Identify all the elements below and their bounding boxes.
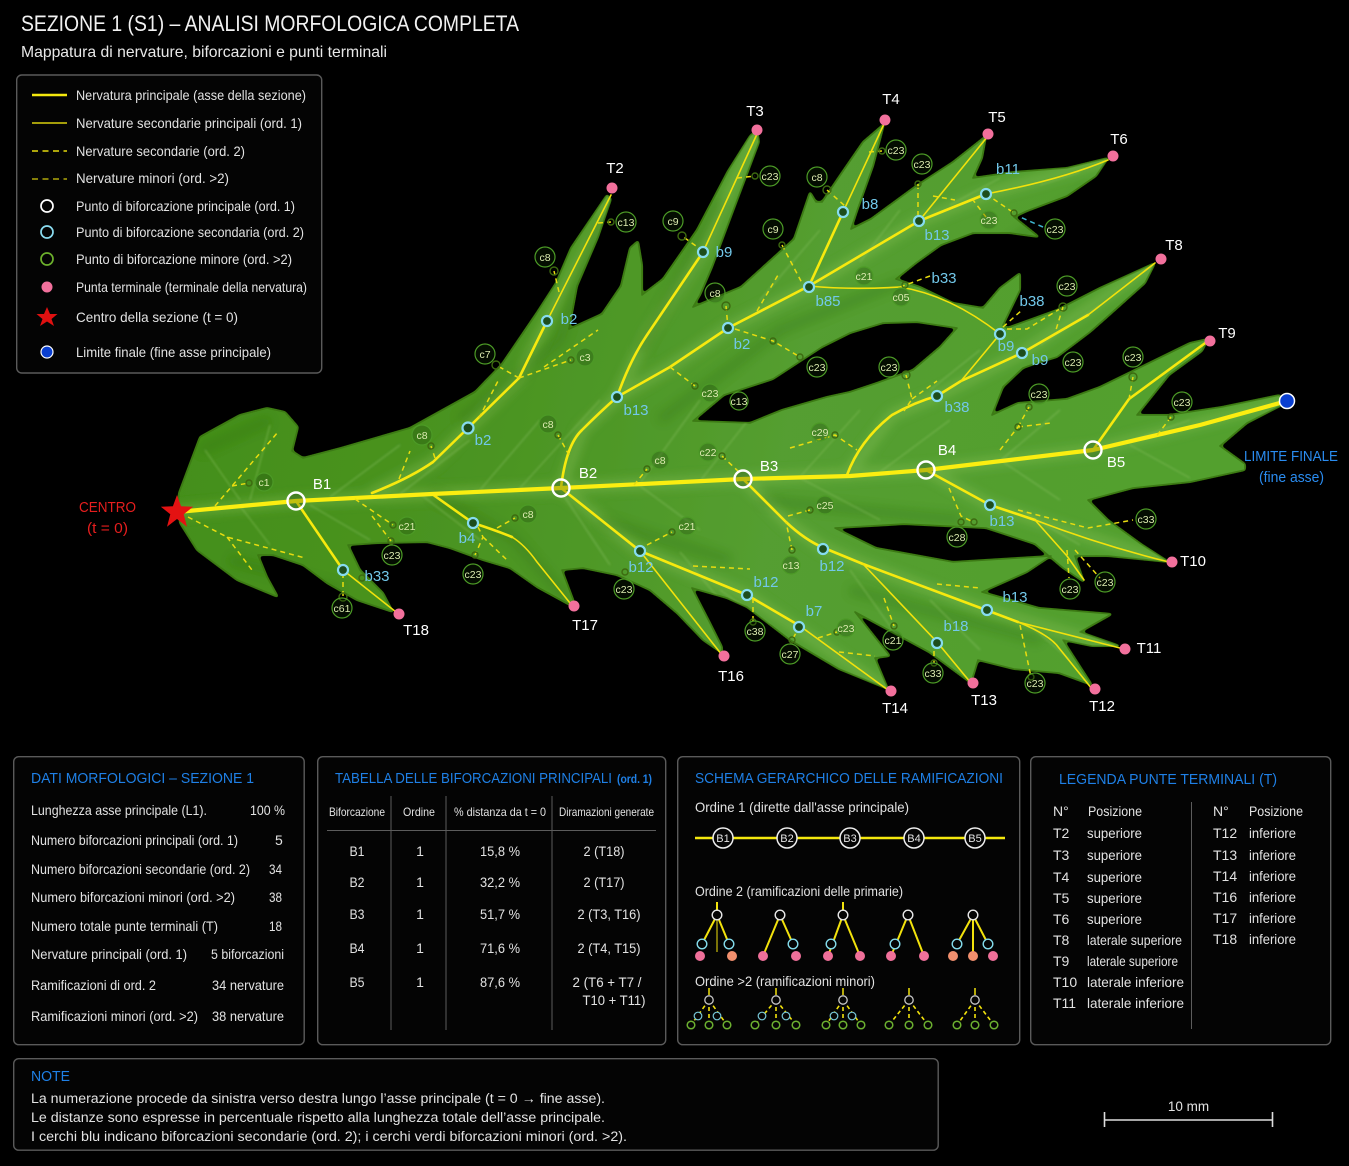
scale bar [1104, 1099, 1273, 1127]
data rows: Numero biforcazioni secondarie (ord. 2) [31, 861, 250, 877]
panel: map legend [17, 75, 322, 373]
panel: notes [14, 1059, 938, 1150]
centre label [79, 500, 136, 537]
legend swatch: terminal tip [42, 282, 52, 292]
minor bifurcation labels: c23 [1047, 224, 1064, 236]
table rows: B3 [350, 906, 365, 922]
right column: T18 [1213, 931, 1237, 947]
right column: T16 [1213, 889, 1237, 905]
centre label: (t = 0) [87, 521, 128, 537]
secondary bifurcation labels: b9 [716, 244, 732, 261]
table rows: 15,8 % [480, 843, 520, 859]
right column [1213, 803, 1303, 947]
minor bifurcation labels: c23 [465, 569, 482, 581]
panel heading: DATI MORFOLOGICI – SEZIONE 1 [31, 770, 254, 787]
table rows: 2 (T4, T15) [578, 940, 640, 956]
legend swatch: secondary bifurcation [41, 226, 53, 238]
left column: T3 [1053, 847, 1070, 863]
end limit label: (fine asse) [1259, 470, 1324, 486]
minor bifurcation labels: c1 [258, 477, 270, 489]
secondary bifurcation labels: b18 [943, 618, 969, 635]
left column: N° [1053, 803, 1069, 819]
minor bifurcation labels: c3 [579, 352, 591, 364]
data rows: 18 [269, 918, 282, 934]
left column: T4 [1053, 869, 1070, 885]
terminal tips [394, 114, 1216, 696]
left column: T9 [1053, 953, 1070, 969]
terminal tip labels [403, 91, 1236, 717]
minor bifurcation labels: c23 [1125, 352, 1142, 364]
right column: inferiore [1249, 868, 1296, 884]
table rows: 87,6 % [480, 974, 520, 990]
left column: T5 [1053, 890, 1070, 906]
end limit label: LIMITE FINALE [1244, 449, 1338, 465]
minor bifurcation labels: c28 [949, 532, 966, 544]
left column: T11 [1053, 995, 1076, 1011]
legend swatch: secondary vein [32, 150, 67, 152]
notes text: La numerazione procede da sinistra verso destra lungo l’asse principale (t = 0 → fine asse). [31, 1091, 605, 1106]
data rows: Nervature principali (ord. 1) [31, 946, 187, 962]
left column: laterale inferiore [1087, 995, 1184, 1011]
table header [329, 805, 654, 819]
minor bifurcation labels: c22 [700, 447, 717, 459]
terminal tip labels: T18 [403, 622, 429, 639]
legend labels: Centro della sezione (t = 0) [76, 309, 238, 325]
order 1 diagram: B4 [907, 833, 921, 845]
minor bifurcation labels: c23 [1059, 281, 1076, 293]
table rows: 1 [416, 940, 424, 956]
secondary bifurcation labels: b2 [561, 311, 577, 328]
table heading: (ord. 1) [617, 774, 652, 786]
minor bifurcation labels: c13 [783, 560, 800, 572]
minor bifurcation labels: c9 [667, 216, 679, 228]
minor bifurcation labels: c27 [782, 649, 799, 661]
right column: T13 [1213, 847, 1237, 863]
secondary bifurcation labels: b13 [623, 402, 649, 419]
secondary bifurcation labels: b11 [996, 161, 1020, 178]
table rows: 1 [416, 843, 424, 859]
minor bifurcation labels: c8 [542, 419, 554, 431]
legend labels: Nervature secondarie (ord. 2) [76, 143, 245, 159]
data rows: 34 nervature [212, 977, 284, 993]
minor bifurcation labels: c23 [762, 171, 779, 183]
minor bifurcation labels: c61 [334, 603, 351, 615]
minor bifurcation labels: c23 [981, 215, 998, 227]
table rows: T10 + T11) [582, 992, 646, 1008]
secondary bifurcation labels: b12 [753, 574, 779, 591]
primary bifurcation labels: B3 [760, 458, 778, 475]
right column: inferiore [1249, 847, 1296, 863]
minor bifurcation labels: c23 [616, 584, 633, 596]
legend swatch: secondary main vein [32, 122, 67, 124]
table rows: 1 [416, 874, 424, 890]
order 1 label: Ordine 1 (dirette dall'asse principale) [695, 799, 909, 815]
order >2 diagrams [687, 988, 998, 1029]
minor bifurcation labels: c8 [811, 172, 823, 184]
table rows: B4 [350, 940, 365, 956]
minor bifurcation labels: c23 [702, 388, 719, 400]
panel: bifurcation table [318, 757, 666, 1045]
table heading: TABELLA DELLE BIFORCAZIONI PRINCIPALI [335, 770, 612, 787]
primary bifurcation labels: B5 [1107, 454, 1125, 471]
legend heading: LEGENDA PUNTE TERMINALI (T) [1059, 771, 1277, 788]
table rows: 2 (T18) [584, 843, 624, 859]
secondary bifurcation labels: b33 [931, 270, 957, 287]
terminal tip labels: T2 [606, 160, 624, 177]
terminal tip labels: T6 [1110, 131, 1128, 148]
legend labels: Limite finale (fine asse principale) [76, 344, 271, 360]
data rows: Numero biforcazioni minori (ord. >2) [31, 889, 235, 905]
primary bifurcation labels: B4 [938, 442, 956, 459]
data rows: 38 [269, 889, 282, 905]
primary bifurcation labels: B2 [579, 465, 597, 482]
right column: inferiore [1249, 825, 1296, 841]
legend swatch: centre star [36, 307, 58, 326]
secondary bifurcation nodes [338, 189, 1027, 648]
secondary bifurcation labels: b2 [475, 432, 491, 449]
left column: T8 [1053, 932, 1070, 948]
schema heading: SCHEMA GERARCHICO DELLE RAMIFICAZIONI [695, 770, 1003, 787]
secondary bifurcation labels: b38 [944, 399, 970, 416]
minor bifurcation labels: c23 [838, 623, 855, 635]
minor bifurcation labels: c8 [539, 252, 551, 264]
minor bifurcation labels: c23 [1027, 678, 1044, 690]
terminal tip labels: T9 [1218, 325, 1236, 342]
secondary bifurcation labels: b4 [459, 530, 475, 547]
terminal tip labels: T14 [882, 700, 908, 717]
table rows: B2 [350, 874, 365, 890]
table rows: 71,6 % [480, 940, 520, 956]
legend labels: Nervature secondarie principali (ord. 1) [76, 115, 302, 131]
order 1 diagram: B3 [843, 833, 857, 845]
secondary bifurcation labels: b33 [364, 568, 390, 585]
terminal tip labels: T17 [572, 617, 598, 634]
notes text: I cerchi blu indicano biforcazioni secondarie (ord. 2); i cerchi verdi biforcazioni minori (ord. >2). [31, 1129, 627, 1144]
minor bifurcation labels: c13 [618, 217, 635, 229]
legend labels [76, 87, 307, 360]
terminal tip labels: T5 [988, 109, 1006, 126]
minor bifurcation labels: c21 [399, 521, 416, 533]
minor bifurcation labels: c21 [885, 635, 902, 647]
left column: laterale superiore [1087, 932, 1182, 948]
table rows: 2 (T17) [584, 874, 624, 890]
terminal tip labels: T11 [1137, 640, 1161, 657]
table header: Ordine [403, 805, 435, 819]
right column: N° [1213, 803, 1229, 819]
left column: superiore [1087, 869, 1142, 885]
left column: T6 [1053, 911, 1070, 927]
left column: T2 [1053, 825, 1070, 841]
minor bifurcation labels: c23 [881, 362, 898, 374]
minor bifurcation labels: c21 [856, 271, 873, 283]
main axis [177, 401, 1287, 512]
table header: Biforcazione [329, 805, 385, 819]
legend swatch: minor vein [32, 178, 67, 180]
minor bifurcation labels: c38 [747, 626, 764, 638]
table rows: 1 [416, 974, 424, 990]
table rows: B1 [350, 843, 365, 859]
small node rings [246, 148, 1174, 680]
primary bifurcation labels: B1 [313, 476, 331, 493]
table header: % distanza da t = 0 [454, 805, 546, 819]
data rows: Ramificazioni di ord. 2 [31, 977, 156, 993]
left column: Posizione [1088, 803, 1142, 819]
notes text: Le distanze sono espresse in percentuale rispetto alla lunghezza totale dell’asse principale. [31, 1110, 605, 1125]
minor bifurcation labels: c23 [914, 159, 931, 171]
terminal tip labels: T13 [971, 692, 997, 709]
data rows: 5 biforcazioni [211, 946, 284, 962]
table rows: B5 [350, 974, 365, 990]
order 2 label: Ordine 2 (ramificazioni delle primarie) [695, 883, 903, 899]
minor bifurcation labels: c23 [1062, 584, 1079, 596]
minor bifurcation labels: c23 [384, 550, 401, 562]
panel: terminal tips legend [1031, 757, 1331, 1045]
left column [1053, 803, 1184, 1011]
data rows: Lunghezza asse principale (L1). [31, 802, 207, 818]
secondary bifurcation labels: b2 [734, 336, 750, 353]
end limit label [1244, 449, 1338, 486]
data rows [31, 802, 285, 1024]
minor bifurcation labels [255, 140, 1192, 693]
minor bifurcation labels: c05 [893, 292, 910, 304]
terminal tip labels: T8 [1165, 237, 1183, 254]
order 1 diagram: B2 [780, 833, 794, 845]
subtitle: Mappatura di nervature, biforcazioni e punti terminali [21, 44, 387, 61]
minor bifurcation labels: c33 [1138, 514, 1155, 526]
secondary bifurcation labels: b9 [998, 338, 1014, 355]
panel: morphological data [14, 757, 304, 1045]
secondary bifurcation labels: b12 [819, 558, 845, 575]
minor bifurcation labels: c23 [1065, 357, 1082, 369]
minor bifurcation labels: c8 [654, 455, 666, 467]
table rows: 51,7 % [480, 906, 520, 922]
table rows [350, 843, 646, 1008]
secondary bifurcation labels: b85 [815, 293, 841, 310]
left column: laterale superiore [1087, 953, 1178, 969]
panel: hierarchy schema [678, 757, 1020, 1045]
data rows: 38 nervature [212, 1008, 284, 1024]
order 1 diagram: B5 [968, 833, 982, 845]
secondary bifurcation labels: b12 [628, 559, 654, 576]
terminal tip labels: T12 [1089, 698, 1115, 715]
terminal tip labels: T3 [746, 103, 764, 120]
minor bifurcation labels: c29 [812, 427, 829, 439]
secondary bifurcation labels: b13 [989, 513, 1015, 530]
minor bifurcation labels: c23 [1174, 397, 1191, 409]
left column: T10 [1053, 974, 1077, 990]
terminal tip labels: T16 [718, 668, 744, 685]
minor bifurcation labels: c23 [888, 145, 905, 157]
order 1 diagram [695, 828, 1005, 848]
legend labels: Nervatura principale (asse della sezione) [76, 87, 306, 103]
table grid [327, 796, 656, 1030]
data rows: Ramificazioni minori (ord. >2) [31, 1008, 198, 1024]
minor bifurcation labels: c8 [522, 509, 534, 521]
secondary bifurcation labels [364, 161, 1048, 635]
legend swatch: primary bifurcation [41, 200, 53, 212]
right column: inferiore [1249, 889, 1296, 905]
secondary bifurcation labels: b9 [1032, 352, 1048, 369]
minor bifurcation labels: c23 [1031, 389, 1048, 401]
minor bifurcation labels: c13 [731, 396, 748, 408]
right column: T12 [1213, 825, 1237, 841]
minor bifurcation labels: c8 [709, 288, 721, 300]
notes heading: NOTE [31, 1068, 70, 1085]
data rows: Numero biforcazioni principali (ord. 1) [31, 832, 238, 848]
leaf illustration [79, 91, 1338, 717]
right column: inferiore [1249, 931, 1296, 947]
left column: superiore [1087, 847, 1142, 863]
data rows: 5 [275, 832, 283, 848]
minor bifurcation labels: c21 [679, 521, 696, 533]
secondary bifurcation labels: b7 [806, 603, 822, 620]
terminal tip labels: T4 [882, 91, 900, 108]
legend labels: Punto di biforcazione secondaria (ord. 2) [76, 224, 304, 240]
data rows: 100 % [250, 802, 285, 818]
leaf blade with shading [177, 124, 1287, 690]
minor bifurcation labels: c9 [767, 224, 779, 236]
end limit point [1280, 394, 1294, 408]
table header: Diramazioni generate [559, 805, 654, 819]
secondary bifurcation labels: b13 [924, 227, 950, 244]
minor bifurcation labels: c33 [925, 668, 942, 680]
right column: Posizione [1249, 803, 1303, 819]
dashed minor veins [188, 151, 1171, 677]
data rows: Numero totale punte terminali (T) [31, 918, 218, 934]
column divider [1190, 802, 1192, 1029]
left column: laterale inferiore [1087, 974, 1184, 990]
left column: superiore [1087, 911, 1142, 927]
legend swatch: main vein [32, 94, 67, 96]
legend labels: Punta terminale (terminale della nervatura) [76, 279, 307, 295]
minor bifurcation labels: c23 [1097, 577, 1114, 589]
order 1 diagram: B1 [716, 833, 730, 845]
centre label: CENTRO [79, 500, 136, 516]
primary bifurcation nodes [288, 442, 1102, 510]
title: SEZIONE 1 (S1) – ANALISI MORFOLOGICA COMPLETA [21, 11, 519, 36]
minor bifurcation labels: c7 [479, 349, 491, 361]
left column: superiore [1087, 825, 1142, 841]
notes text [31, 1091, 627, 1144]
legend swatch: minor bifurcation [41, 253, 53, 265]
right column: T14 [1213, 868, 1237, 884]
left column: superiore [1087, 890, 1142, 906]
minor bifurcation labels: c25 [817, 500, 834, 512]
legend labels: Punto di biforcazione minore (ord. >2) [76, 251, 292, 267]
centre star [161, 495, 193, 527]
legend labels: Nervature minori (ord. >2) [76, 170, 229, 186]
minor bifurcation labels: c23 [809, 362, 826, 374]
right column: T17 [1213, 910, 1237, 926]
order >2 label: Ordine >2 (ramificazioni minori) [695, 973, 875, 989]
main veins of order 1 and 2 [296, 124, 1208, 690]
table rows: 32,2 % [480, 874, 520, 890]
legend swatch: end limit [41, 346, 53, 358]
table rows: 2 (T6 + T7 / [572, 974, 642, 990]
scale bar: 10 mm [1168, 1099, 1209, 1114]
primary bifurcation labels [313, 442, 1125, 493]
table rows: 1 [416, 906, 424, 922]
minor bifurcation labels: c8 [416, 430, 428, 442]
table rows: 2 (T3, T16) [578, 906, 640, 922]
secondary bifurcation labels: b13 [1002, 589, 1028, 606]
right column: inferiore [1249, 910, 1296, 926]
data rows: 34 [269, 861, 282, 877]
legend labels: Punto di biforcazione principale (ord. 1) [76, 198, 295, 214]
secondary bifurcation labels: b38 [1019, 293, 1045, 310]
secondary bifurcation labels: b8 [862, 196, 878, 213]
order 2 diagrams [695, 902, 998, 961]
terminal tip labels: T10 [1180, 553, 1206, 570]
